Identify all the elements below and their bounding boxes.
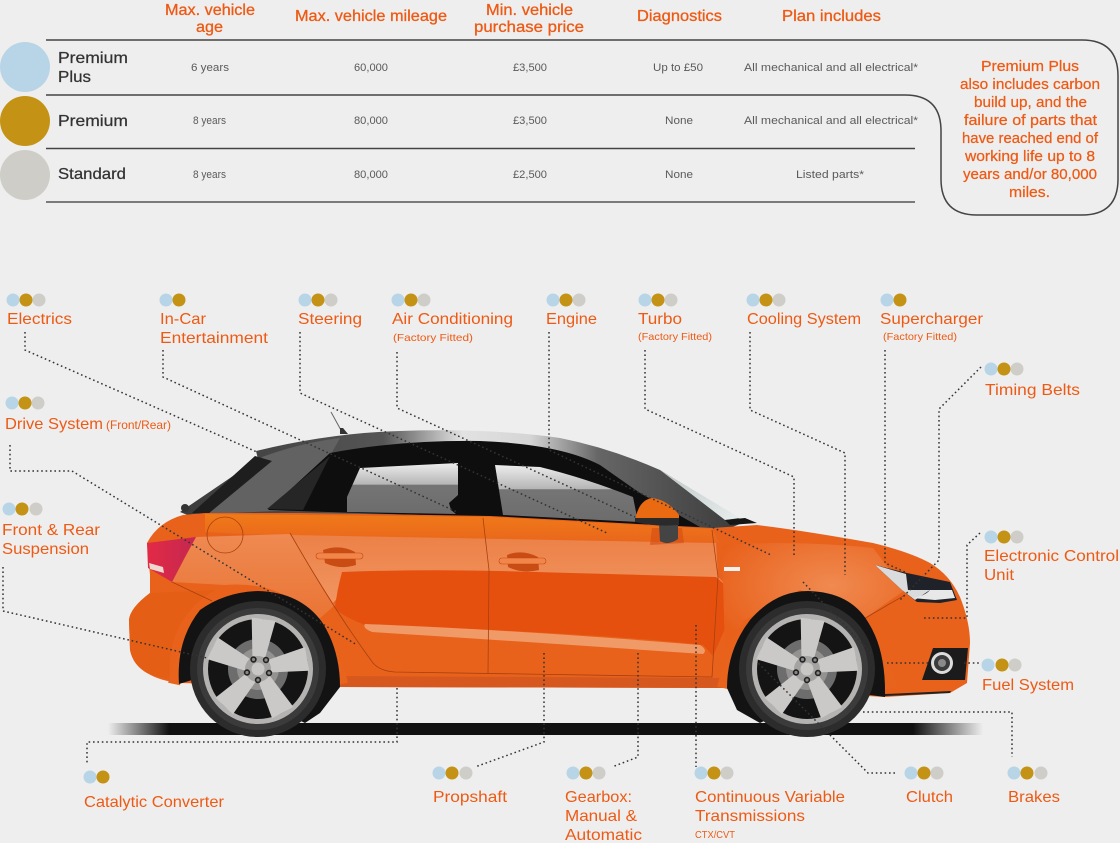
row: Premium Plus: Premium: [58, 50, 128, 67]
part label: Supercharger: (Factory Fitted): [883, 331, 957, 343]
leader: Cooling System: [750, 332, 845, 575]
leader: Drive System: [10, 445, 357, 645]
car: aerial: [331, 412, 348, 434]
leader: Air Conditioning: [397, 352, 635, 517]
part label: Fuel System: [982, 658, 1074, 694]
car: windscreen: [660, 470, 740, 520]
part label: Clutch: Clutch: [906, 789, 953, 806]
part label: Electrics: [6, 294, 72, 328]
row: Standard: £2,500: [513, 169, 547, 181]
part label: Supercharger: Supercharger: [880, 311, 984, 328]
car: top belt band: [205, 514, 720, 543]
part label: Supercharger: [880, 294, 984, 343]
leader: Electronic Control Unit: [922, 533, 980, 618]
part label: Continuous Variable Transmissions: Continuous Variable: [695, 789, 845, 806]
leader: Turbo: [645, 350, 794, 555]
leader: Engine: [549, 332, 771, 555]
car: front fender: [722, 543, 905, 650]
part label: Electrics: Electrics: [7, 311, 72, 328]
leader: Electrics: [25, 332, 257, 452]
leader: Timing Belts: [900, 367, 981, 600]
leader: second Clutch branch: [803, 582, 873, 655]
row: Standard: 80,000: [354, 169, 388, 181]
car: rear quarter highlight: [172, 534, 335, 620]
row: Premium: None: [665, 115, 693, 127]
leader: Front and Rear Suspension: [3, 567, 207, 658]
car: front door glass: [495, 465, 638, 522]
part label: Air Conditioning: Air Conditioning: [392, 311, 513, 328]
car: rear wiper nub: [181, 504, 189, 512]
callout: Premium Plus extras: years and/or 80,000: [963, 166, 1097, 183]
car: body shell: [129, 513, 970, 697]
part label: Cooling System: [746, 294, 861, 328]
callout: Premium Plus extras: build up, and the: [974, 94, 1087, 111]
leader: In-Car Entertainment: [163, 350, 457, 512]
part label: Propshaft: Propshaft: [433, 789, 508, 806]
leader: Catalytic Converter: [87, 688, 397, 765]
car: front wheel arch: [727, 591, 885, 723]
part label: Brakes: Brakes: [1008, 789, 1060, 806]
part label: In-Car Entertainment: [160, 294, 269, 347]
car: front arch band: [723, 620, 891, 688]
car: rear door glass: [347, 463, 458, 514]
car: sill highlight: [364, 624, 705, 654]
car: front door handle: [499, 552, 546, 571]
part label: Continuous Variable Transmissions: Transmissions: [695, 808, 805, 825]
table column headings: Min. vehicle: [486, 2, 573, 19]
car: roof and pillars: [180, 430, 745, 530]
callout: Premium Plus extras: miles.: [1009, 184, 1050, 201]
leader: Steering: [300, 332, 607, 533]
ground shadow: [108, 723, 983, 735]
leader: Clutch: [757, 662, 895, 773]
part label: Front and Rear Suspension: Front & Rear: [2, 522, 101, 539]
leader: Continuous Variable Transmissions: [695, 625, 697, 767]
car: fog light: [931, 652, 953, 674]
part label: Air Conditioning: [392, 294, 513, 344]
leader: Brakes: [863, 712, 1012, 757]
car: rear arch band: [174, 616, 342, 684]
row: Premium: Premium: [58, 113, 128, 130]
row: Premium: 80,000: [354, 115, 388, 127]
car: fog light housing: [922, 648, 968, 680]
part label: Air Conditioning: (Factory Fitted): [393, 332, 473, 344]
car: rear screen: [192, 456, 272, 514]
row: Standard: Standard: [58, 166, 126, 183]
row: Premium: £3,500: [513, 115, 547, 127]
part label: Timing Belts: [984, 362, 1080, 399]
table column headings: Max. vehicle mileage: [295, 8, 447, 25]
row: Premium: All mechanical and all electrical*: [744, 115, 919, 127]
part label: Drive System: [5, 396, 171, 433]
part label: Catalytic Converter: [84, 770, 225, 811]
part label: Gearbox: [565, 766, 642, 843]
callout: Premium Plus extras: Premium Plus: [981, 58, 1079, 75]
dotted leader lines: [3, 332, 1012, 773]
leader: Fuel System: [887, 662, 979, 664]
part label: Electronic Control Unit: Electronic Control: [984, 548, 1119, 565]
callout: Premium Plus extras: also includes carbon: [960, 76, 1100, 93]
part label: Steering: Steering: [298, 311, 362, 328]
car: rear bumper shade: [129, 590, 215, 680]
part label: Turbo: Turbo: [638, 311, 682, 328]
car: door mirror: [635, 498, 679, 543]
row: Premium: [0, 96, 919, 146]
row: Standard: 8 years: [193, 169, 226, 181]
car: lower sill: [340, 676, 725, 688]
car: door highlight band: [290, 535, 731, 622]
part label: Timing Belts: Timing Belts: [985, 382, 1080, 399]
part label: Steering: [298, 294, 362, 328]
row: Premium Plus: £3,500: [513, 62, 547, 74]
callout: Premium Plus extras: failure of parts that: [964, 112, 1098, 129]
part label: Engine: Engine: [546, 311, 597, 328]
row: Premium Plus: Plus: [58, 69, 91, 86]
table rules and callout outline: [46, 40, 1118, 215]
row: Standard: [0, 150, 865, 200]
part label: In-Car Entertainment: Entertainment: [160, 330, 269, 347]
part label: Continuous Variable Transmissions: [694, 766, 845, 841]
car: front wheel: [739, 601, 875, 737]
callout: Premium Plus extras: have reached end of: [962, 130, 1099, 147]
row: Premium: 8 years: [193, 115, 226, 127]
car: rear door handle: [316, 547, 363, 567]
car illustration: [129, 412, 970, 737]
car: tail light: [147, 537, 196, 582]
part label: Fuel System: Fuel System: [982, 677, 1074, 694]
car: door reflection: [335, 570, 731, 656]
part label: Propshaft: [432, 766, 508, 806]
comparison table: [0, 2, 1118, 215]
part label: Front and Rear Suspension: Suspension: [2, 541, 89, 558]
part label: In-Car Entertainment: In-Car: [160, 311, 207, 328]
leader: Gearbox: [612, 653, 638, 767]
table column headings: Plan includes: [782, 8, 881, 25]
car: headlight: [875, 565, 957, 603]
part label: Brakes: [1008, 766, 1060, 806]
part label: Continuous Variable Transmissions: CTX/CVT: [695, 829, 736, 841]
car: front lower lip: [885, 691, 951, 696]
row: Premium Plus: All mechanical and all electrical*: [744, 62, 919, 74]
car: wiper: [725, 518, 757, 525]
car: window frame: [268, 441, 700, 527]
part label: Gearbox: Gearbox:: [565, 789, 632, 806]
car: fender badge: [724, 567, 740, 571]
callout: Premium Plus extras: [960, 58, 1100, 201]
part label: Engine: [546, 294, 597, 328]
row: Premium Plus: 6 years: [191, 62, 230, 74]
part label: Catalytic Converter: Catalytic Converter: [84, 794, 225, 811]
table column headings: Max. vehicle: [165, 2, 255, 19]
row: Premium Plus: Up to £50: [653, 62, 703, 74]
row: Standard: Listed parts*: [796, 169, 865, 181]
row: Premium Plus: 60,000: [354, 62, 388, 74]
leader: Propshaft: [475, 653, 544, 767]
row: Premium Plus: [0, 42, 919, 92]
table column headings: [165, 2, 881, 36]
table column headings: Diagnostics: [637, 8, 722, 25]
table column headings: age: [196, 19, 223, 36]
part label: Electronic Control Unit: [984, 530, 1119, 584]
part label: Turbo: [638, 294, 712, 343]
car: rear quarter panel: [208, 438, 340, 514]
part label: Front and Rear Suspension: [2, 502, 101, 558]
part label: Clutch: [904, 766, 953, 806]
part label: Gearbox: Manual &: [565, 808, 637, 825]
car: rear wheel arch: [179, 591, 340, 723]
callout: Premium Plus extras: working life up to 8: [964, 148, 1095, 165]
car: shut lines: [172, 517, 905, 677]
car: rear quarter glass: [267, 456, 330, 510]
part label: Drive System: Drive System: [5, 416, 103, 433]
part label: Drive System: (Front/Rear): [106, 418, 171, 432]
part label: Turbo: (Factory Fitted): [638, 331, 712, 343]
row: Standard: None: [665, 169, 693, 181]
car: mirror shadow: [650, 528, 684, 545]
part label: Electronic Control Unit: Unit: [984, 567, 1015, 584]
part label: Cooling System: Cooling System: [747, 311, 861, 328]
leader: Supercharger: [885, 350, 905, 572]
table column headings: purchase price: [474, 19, 584, 36]
car: rear wheel: [190, 601, 326, 737]
